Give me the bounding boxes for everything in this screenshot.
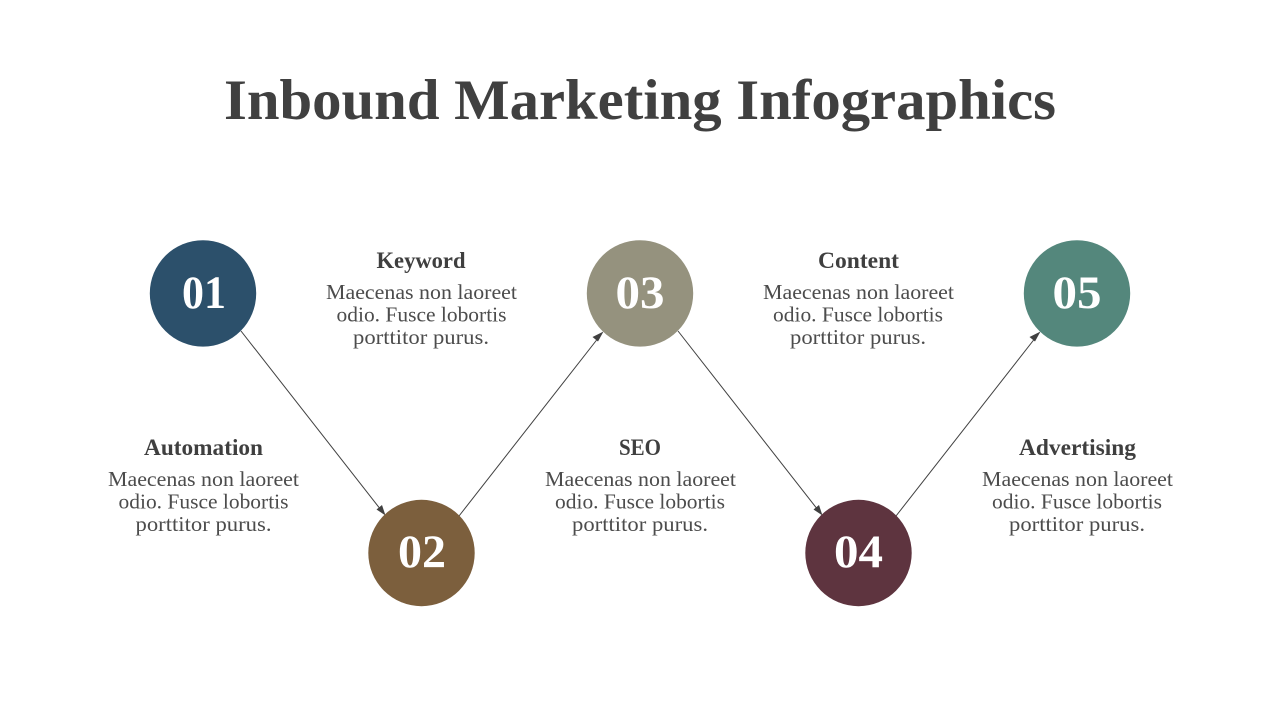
text block: Automation: Maecenas non laoreet bbox=[108, 467, 299, 491]
arrow: 02 to 03 bbox=[459, 332, 604, 516]
step 01 badge bbox=[150, 240, 256, 347]
text block: Automation bbox=[108, 435, 299, 536]
step 03 badge bbox=[587, 240, 693, 347]
text block: Keyword bbox=[326, 248, 517, 349]
text block: SEO: porttitor purus. bbox=[572, 512, 708, 536]
text block: Automation: odio. Fusce lobortis bbox=[118, 490, 288, 514]
step 04 badge: 04 bbox=[834, 526, 883, 578]
text block: Automation: Automation bbox=[144, 435, 263, 460]
text block: Keyword: porttitor purus. bbox=[353, 325, 489, 349]
step 04 badge bbox=[805, 500, 912, 606]
title: Inbound Marketing Infographics bbox=[224, 69, 1056, 132]
text block: Advertising bbox=[982, 435, 1173, 536]
text block: Advertising: porttitor purus. bbox=[1009, 512, 1145, 536]
text block: Advertising: odio. Fusce lobortis bbox=[992, 490, 1162, 514]
text block: Automation: porttitor purus. bbox=[136, 512, 272, 536]
text block: Content: odio. Fusce lobortis bbox=[773, 302, 943, 326]
text block: Advertising: Maecenas non laoreet bbox=[982, 467, 1173, 491]
text block: Advertising: Advertising bbox=[1019, 435, 1137, 460]
text block: Keyword: Maecenas non laoreet bbox=[326, 280, 517, 304]
step 03 badge: 03 bbox=[616, 267, 664, 319]
text block: Keyword: odio. Fusce lobortis bbox=[336, 302, 506, 326]
text block: SEO: Maecenas non laoreet bbox=[545, 467, 736, 491]
text block: Content: porttitor purus. bbox=[790, 325, 926, 349]
text block: Content bbox=[763, 248, 954, 349]
text block: Content: Content bbox=[818, 248, 899, 273]
step 01 badge: 01 bbox=[182, 267, 226, 319]
step 02 badge: 02 bbox=[398, 526, 446, 578]
arrow: 01 to 02 bbox=[241, 331, 386, 516]
step 05 badge: 05 bbox=[1052, 267, 1102, 319]
text block: SEO: SEO bbox=[619, 435, 661, 460]
text block: Keyword: Keyword bbox=[376, 248, 466, 273]
text block: SEO bbox=[545, 435, 736, 536]
text block: Content: Maecenas non laoreet bbox=[763, 280, 954, 304]
arrow: 04 to 05 bbox=[896, 332, 1040, 516]
text block: SEO: odio. Fusce lobortis bbox=[555, 490, 725, 514]
step 05 badge bbox=[1024, 240, 1130, 347]
arrow: 03 to 04 bbox=[678, 331, 822, 516]
step 02 badge bbox=[368, 500, 475, 606]
